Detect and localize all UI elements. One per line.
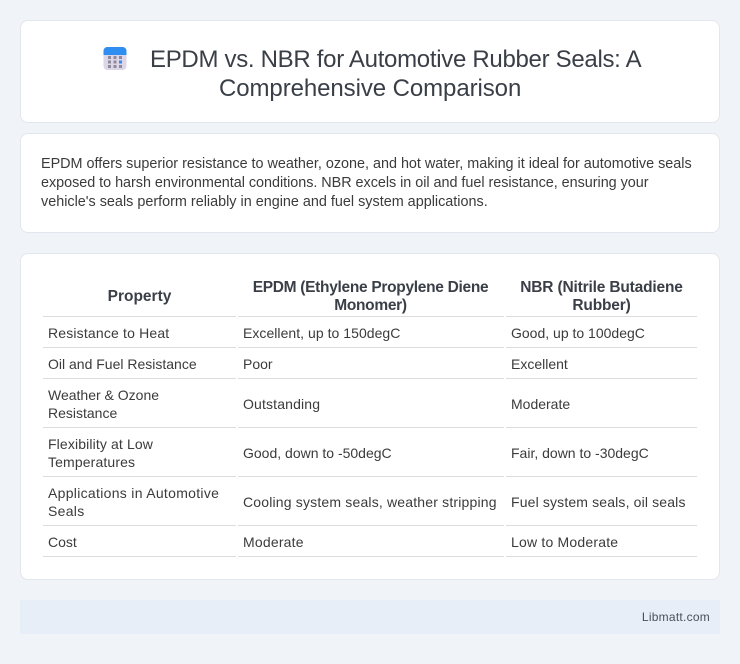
row: weather [48,387,159,421]
row: applications: Seals [48,503,85,519]
header: property: Property [108,288,171,305]
row: heat: Resistance to Heat [48,325,169,341]
icon: calendar [104,47,126,70]
footer bar [20,600,720,634]
comparison table: Poor [243,356,273,372]
comparison table: Outstanding [243,396,320,412]
row: weather: Weather & Ozone [48,387,159,403]
header: NBR [520,279,683,314]
header panel [20,20,720,123]
comparison table [43,279,697,557]
comparison table: Excellent, up to 150degC [243,325,400,341]
comparison table: Fuel system seals, oil seals [511,494,686,510]
title [150,46,642,102]
comparison table: Good, up to 100degC [511,325,645,341]
comparison table: Moderate [511,396,570,412]
comparison table: Excellent [511,356,568,372]
intro text: exposed to harsh environmental conditions. NBR excels in oil and fuel resistance, ensuring your [41,175,648,191]
footer text: Libmatt.com [642,610,710,624]
header: EPDM: EPDM (Ethylene Propylene Diene [253,279,488,296]
comparison table panel [20,253,720,580]
header: EPDM: Monomer) [334,297,407,314]
row: cost: Cost [48,534,77,550]
comparison table: Good, down to -50degC [243,445,392,461]
comparison table: Low to Moderate [511,534,618,550]
title: Comprehensive Comparison [219,75,521,102]
row: oil and fuel: Oil and Fuel Resistance [48,356,197,372]
row: applications: Applications in Automotive [48,485,219,501]
header: NBR: Rubber) [572,297,631,314]
row: applications [48,485,219,519]
row: flexibility [48,436,153,470]
header: NBR: NBR (Nitrile Butadiene [520,279,683,296]
intro panel [20,133,720,233]
comparison table: Cooling system seals, weather stripping [243,494,497,510]
row: weather: Resistance [48,405,117,421]
title: EPDM vs. NBR for Automotive Rubber Seals: A [150,46,641,73]
row: flexibility: Temperatures [48,454,135,470]
intro text: EPDM offers superior resistance to weather, ozone, and hot water, making it ideal for automotive seals [41,156,692,172]
comparison table: Moderate [243,534,304,550]
comparison table: Fair, down to -30degC [511,445,649,461]
intro text: vehicle's seals perform reliably in engine and fuel system applications. [41,194,488,210]
row: flexibility: Flexibility at Low [48,436,153,452]
header: EPDM [253,279,488,314]
intro text [41,156,692,210]
